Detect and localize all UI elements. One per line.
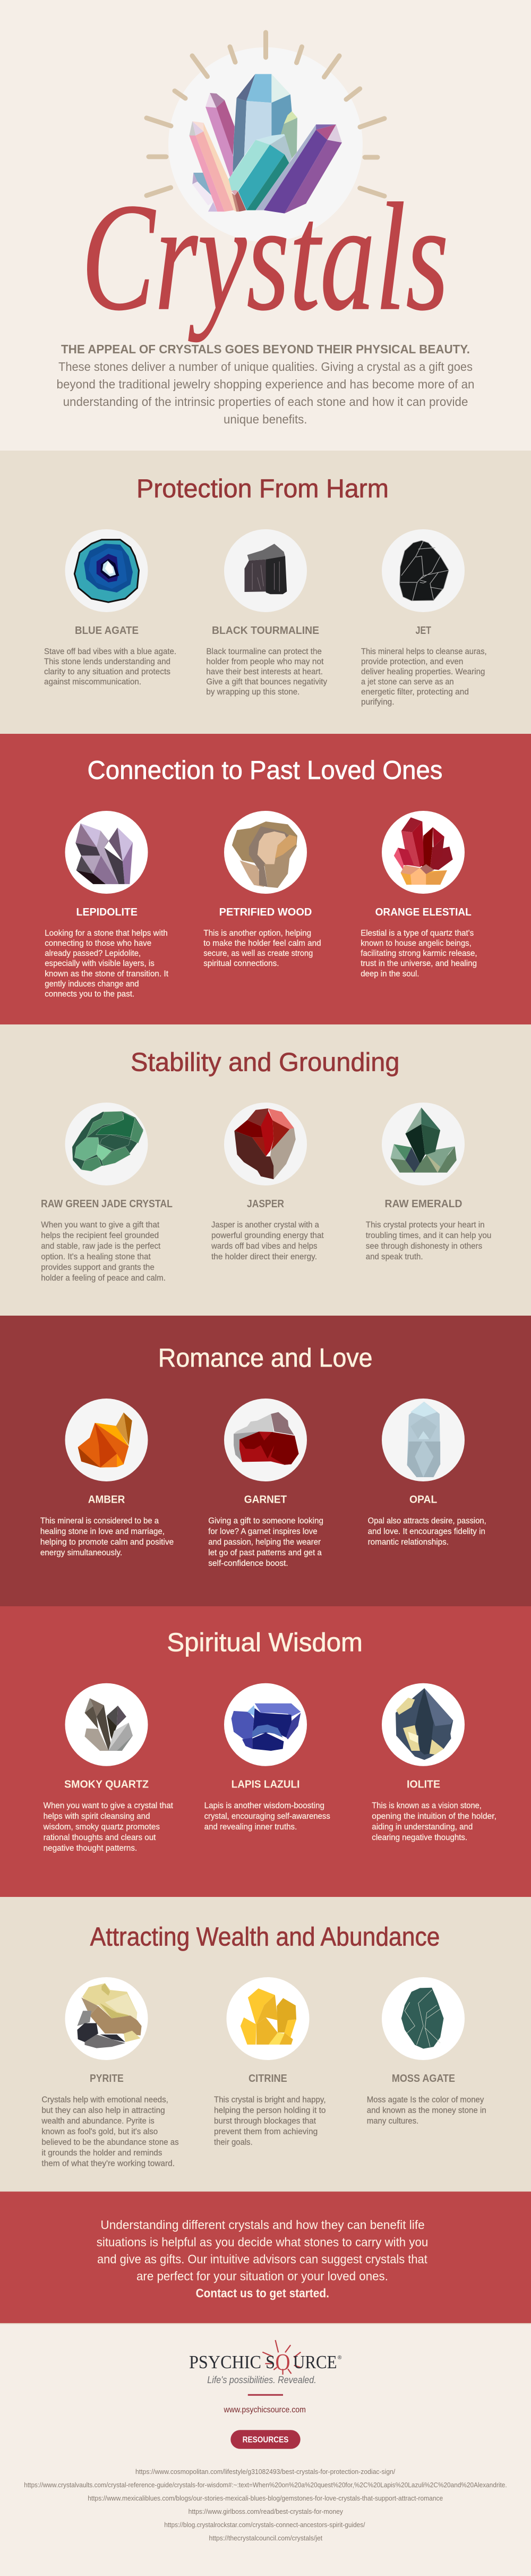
resources list: https://thecrystalcouncil.com/crystals/jet xyxy=(209,2535,323,2542)
description: believed to be the abundance stone as xyxy=(41,2138,179,2147)
panel: romance and love xyxy=(0,1316,531,1606)
icon: raw green jade xyxy=(65,1103,148,1185)
closing text: Understanding different crystals and how they can benefit life xyxy=(100,2218,425,2232)
panel: intro header xyxy=(0,0,531,451)
icon: pyrite xyxy=(65,1977,148,2060)
description: energy simultaneously. xyxy=(40,1548,122,1557)
description: healing stone in love and marriage, xyxy=(40,1527,165,1536)
intro text block: beyond the traditional jewelry shopping experience and has become more of an xyxy=(56,377,475,391)
description xyxy=(367,2095,486,2125)
description: known as fool's gold, but it's also xyxy=(41,2127,158,2136)
card: orange elestial xyxy=(361,811,477,979)
description: connects you to the past. xyxy=(45,989,134,999)
description: burst through blockages that xyxy=(214,2116,316,2125)
card: lepidolite xyxy=(45,811,169,999)
heading: Protection From Harm xyxy=(136,474,389,503)
website url: www.psychicsource.com xyxy=(224,2405,306,2414)
card: opal xyxy=(368,1399,486,1547)
panel: attracting wealth and abundance xyxy=(0,1897,531,2191)
card: blue agate xyxy=(44,529,176,687)
name: RAW GREEN JADE CRYSTAL xyxy=(41,1198,173,1210)
description xyxy=(368,1516,486,1547)
icon: lepidolite xyxy=(65,811,148,894)
card: pyrite xyxy=(41,1977,179,2168)
icon: raw emerald xyxy=(382,1103,465,1185)
heading: Spiritual Wisdom xyxy=(167,1628,363,1657)
description: provide protection, and even xyxy=(361,657,463,666)
description: their goals. xyxy=(214,2138,253,2147)
icon: iolite xyxy=(382,1683,465,1766)
description: helps the recipient feel grounded xyxy=(41,1231,159,1240)
description: This mineral is considered to be a xyxy=(40,1516,159,1526)
heading: Connection to Past Loved Ones xyxy=(87,756,443,785)
description: Jasper is another crystal with a xyxy=(211,1221,319,1230)
logo: psychic source xyxy=(189,2340,342,2385)
description xyxy=(203,929,321,968)
heading: Stability and Grounding xyxy=(131,1048,399,1077)
card: jasper xyxy=(211,1103,324,1261)
intro text block: THE APPEAL OF CRYSTALS GOES BEYOND THEIR PHYSICAL BEAUTY. xyxy=(61,342,470,356)
icon: petrified wood xyxy=(224,811,307,894)
icon: black tourmaline xyxy=(224,529,307,612)
resources list: https://blog.crystalrockstar.com/crystals-connect-ancestors-spirit-guides/ xyxy=(164,2521,365,2529)
description: Crystals help with emotional needs, xyxy=(41,2095,168,2104)
description: already passed? Lepidolite, xyxy=(45,949,141,958)
icon: garnet xyxy=(224,1399,307,1481)
description: Stave off bad vibes with a blue agate. xyxy=(44,647,176,656)
description: provides support and grants the xyxy=(41,1263,155,1272)
description: facilitating strong karmic release, xyxy=(361,949,477,958)
panel: spiritual wisdom xyxy=(0,1606,531,1897)
description: Giving a gift to someone looking xyxy=(208,1516,323,1526)
card: amber xyxy=(40,1399,174,1557)
button: resources xyxy=(230,2430,301,2449)
description: Looking for a stone that helps with xyxy=(45,929,168,938)
description: This is another option, helping xyxy=(203,929,311,938)
description: This crystal is bright and happy, xyxy=(214,2095,326,2104)
card: black tourmaline xyxy=(206,529,327,697)
card: iolite xyxy=(372,1683,496,1842)
description: and speak truth. xyxy=(366,1252,423,1261)
description: against miscommunication. xyxy=(44,677,141,687)
description: wards off bad vibes and helps xyxy=(211,1242,318,1251)
description: deep in the soul. xyxy=(361,969,419,979)
description: When you want to give a crystal that xyxy=(44,1801,174,1810)
description xyxy=(366,1221,491,1261)
description: troubling times, and it can help you xyxy=(366,1231,491,1240)
name: JET xyxy=(415,625,431,637)
description: by wrapping up this stone. xyxy=(206,688,299,697)
closing text: situations is helpful as you decide what stones to carry with you xyxy=(97,2235,428,2249)
description: and love. It encourages fidelity in xyxy=(368,1527,485,1536)
description: helps with spirit cleansing and xyxy=(44,1812,150,1821)
description: secure, as well as create strong xyxy=(203,949,313,958)
resources list: https://www.mexicaliblues.com/blogs/our-stories-mexicali-blues-blog/gemstones-for-love-crystals-that-support-attract-romance xyxy=(88,2495,443,2502)
description: opening the intuition of the holder, xyxy=(372,1812,496,1821)
name: BLUE AGATE xyxy=(75,625,139,637)
description: Moss agate Is the color of money xyxy=(367,2095,484,2104)
description xyxy=(361,929,477,979)
icon: lapis lazuli xyxy=(224,1683,307,1766)
description: and passion, helping the wearer xyxy=(208,1538,321,1547)
description: for love? A garnet inspires love xyxy=(208,1527,318,1536)
description: wisdom, smoky quartz promotes xyxy=(43,1823,160,1832)
closing text: are perfect for your situation or your loved ones. xyxy=(136,2269,388,2283)
description: option. It's a healing stone that xyxy=(41,1252,151,1261)
name: CITRINE xyxy=(249,2073,287,2084)
description: This mineral helps to cleanse auras, xyxy=(361,647,487,656)
description xyxy=(41,1221,166,1283)
description xyxy=(40,1516,174,1557)
icon: moss agate xyxy=(382,1977,465,2060)
description: a jet stone can serve as an xyxy=(361,677,454,687)
description: This stone lends understanding and xyxy=(44,657,170,666)
icon: jasper xyxy=(224,1103,307,1185)
description: powerful grounding energy that xyxy=(211,1231,324,1240)
icon: amber xyxy=(65,1399,148,1481)
logo: psychic source: Life's possibilities. Revealed. xyxy=(207,2375,316,2385)
intro text block: unique benefits. xyxy=(224,412,307,426)
intro text block: understanding of the intrinsic properties of each stone and how it can provide xyxy=(63,395,468,409)
card: moss agate xyxy=(367,1977,486,2125)
card: garnet xyxy=(208,1399,323,1568)
icon: orange elestial xyxy=(382,811,465,894)
name: LAPIS LAZULI xyxy=(232,1779,299,1791)
description: Elestial is a type of quartz that's xyxy=(361,929,474,938)
heading: Attracting Wealth and Abundance xyxy=(90,1922,440,1951)
name: IOLITE xyxy=(407,1779,440,1791)
description xyxy=(372,1801,496,1842)
description xyxy=(214,2095,326,2147)
icon: blue agate xyxy=(65,529,148,612)
resources list: https://www.crystalvaults.com/crystal-reference-guide/crystals-for-wisdom#:~:text=When%20on%20a%20quest%20for,%2C%20Lapis%20Lazuli%2C%20and%20Alexandrite. xyxy=(24,2481,507,2489)
description: known to house angelic beings, xyxy=(361,939,472,948)
panel: closing call to action xyxy=(0,2191,531,2324)
description xyxy=(211,1221,324,1261)
description: it grounds the holder and reminds xyxy=(41,2148,162,2157)
name: OPAL xyxy=(409,1494,437,1506)
description: connecting to those who have xyxy=(45,939,151,948)
name: JASPER xyxy=(247,1198,284,1210)
panel: connection to past loved ones xyxy=(0,734,531,1024)
description: This is known as a vision stone, xyxy=(372,1801,482,1810)
icon: citrine xyxy=(226,1977,309,2060)
description xyxy=(208,1516,323,1568)
card: raw emerald xyxy=(366,1103,491,1261)
description: let go of past patterns and get a xyxy=(208,1548,322,1557)
name: RAW EMERALD xyxy=(384,1198,462,1210)
name: ORANGE ELESTIAL xyxy=(375,906,472,918)
description xyxy=(204,1801,330,1832)
resources list: https://www.cosmopolitan.com/lifestyle/g31082493/best-crystals-for-protection-zodiac-sign/ xyxy=(135,2468,396,2476)
description: purifying. xyxy=(361,698,394,707)
name: PYRITE xyxy=(90,2073,124,2084)
name: MOSS AGATE xyxy=(392,2073,455,2084)
description xyxy=(44,647,176,687)
panel: stability and grounding xyxy=(0,1024,531,1316)
description xyxy=(41,2095,179,2168)
card: lapis lazuli xyxy=(204,1683,330,1832)
panel: protection from harm xyxy=(0,451,531,734)
icon: smoky quartz xyxy=(65,1683,148,1766)
logo: psychic source: ® xyxy=(338,2355,342,2361)
logo: psychic source: PSYCHIC S xyxy=(189,2352,275,2372)
description: Give a gift that bounces negativity xyxy=(206,677,327,687)
closing text xyxy=(97,2218,428,2300)
description: helping to promote calm and positive xyxy=(40,1538,174,1547)
button: resources: RESOURCES xyxy=(243,2436,289,2445)
name: PETRIFIED WOOD xyxy=(219,906,312,918)
description: rational thoughts and clears out xyxy=(44,1833,156,1842)
description: Opal also attracts desire, passion, xyxy=(368,1516,486,1526)
name: LEPIDOLITE xyxy=(76,906,138,918)
card: raw green jade crystal xyxy=(41,1103,173,1283)
closing text: Contact us to get started. xyxy=(196,2286,329,2300)
name: BLACK TOURMALINE xyxy=(212,625,319,637)
description: Black tourmaline can protect the xyxy=(206,647,322,656)
description: negative thought patterns. xyxy=(44,1844,137,1853)
name: GARNET xyxy=(244,1494,287,1506)
logo: psychic source: URCE xyxy=(293,2352,337,2372)
description: When you want to give a gift that xyxy=(41,1221,160,1230)
card: jet xyxy=(361,529,487,707)
intro text block xyxy=(56,342,475,426)
description: crystal, encouraging self-awareness xyxy=(204,1812,330,1821)
description xyxy=(43,1801,174,1853)
description: holder from people who may not xyxy=(206,657,324,666)
description: to make the holder feel calm and xyxy=(203,939,321,948)
description: trust in the universe, and healing xyxy=(361,959,477,968)
card: petrified wood xyxy=(203,811,321,968)
name: AMBER xyxy=(88,1494,125,1506)
heading: Romance and Love xyxy=(158,1344,373,1372)
description: see through dishonesty in others xyxy=(366,1242,482,1251)
name: SMOKY QUARTZ xyxy=(64,1779,149,1791)
description: energetic filter, protecting and xyxy=(361,688,469,697)
icon: opal xyxy=(382,1399,465,1481)
description: gently induces change and xyxy=(45,980,139,988)
description: This crystal protects your heart in xyxy=(366,1221,485,1230)
description: self-confidence boost. xyxy=(208,1559,288,1568)
logo: psychic source: O xyxy=(275,2349,290,2375)
description: prevent them from achieving xyxy=(214,2127,318,2136)
description: and known as the money stone in xyxy=(367,2106,486,2115)
description: romantic relationships. xyxy=(368,1538,449,1547)
description xyxy=(361,647,487,707)
description: aiding in understanding, and xyxy=(372,1823,473,1832)
description: especially with visible layers, is xyxy=(45,959,155,968)
description: clearing negative thoughts. xyxy=(372,1833,467,1842)
closing text: and give as gifts. Our intuitive advisors can suggest crystals that xyxy=(97,2252,427,2266)
description: many cultures. xyxy=(367,2116,418,2125)
description: the holder direct their energy. xyxy=(211,1252,317,1261)
card: smoky quartz xyxy=(43,1683,174,1853)
description: spiritual connections. xyxy=(203,959,279,968)
description: holder a feeling of peace and calm. xyxy=(41,1274,166,1283)
description: wealth and abundance. Pyrite is xyxy=(41,2116,155,2125)
panel: footer xyxy=(0,2324,531,2576)
description: known as the stone of transition. It xyxy=(45,969,169,979)
description xyxy=(206,647,327,697)
description xyxy=(45,929,169,999)
description: and stable, raw jade is the perfect xyxy=(41,1242,161,1251)
description: have their best interests at heart. xyxy=(206,667,323,676)
card: citrine xyxy=(214,1977,326,2147)
icon: jet xyxy=(382,529,465,612)
icon: sunburst halo behind crystals xyxy=(147,32,384,242)
description: Lapis is another wisdom-boosting xyxy=(204,1801,324,1810)
resources list: https://www.girlboss.com/read/best-crystals-for-money xyxy=(189,2508,344,2515)
description: deliver healing properties. Wearing xyxy=(361,667,485,676)
resources list xyxy=(24,2468,507,2542)
intro text block: These stones deliver a number of unique qualities. Giving a crystal as a gift goes xyxy=(58,360,473,374)
description: but they can also help in attracting xyxy=(41,2106,165,2115)
description: clarity to any situation and protects xyxy=(44,667,170,676)
description: and revealing inner truths. xyxy=(204,1823,297,1832)
icon: crystal cluster xyxy=(189,74,342,214)
description: helping the person holding it to xyxy=(214,2106,326,2115)
description: them of what they're working toward. xyxy=(41,2159,175,2168)
